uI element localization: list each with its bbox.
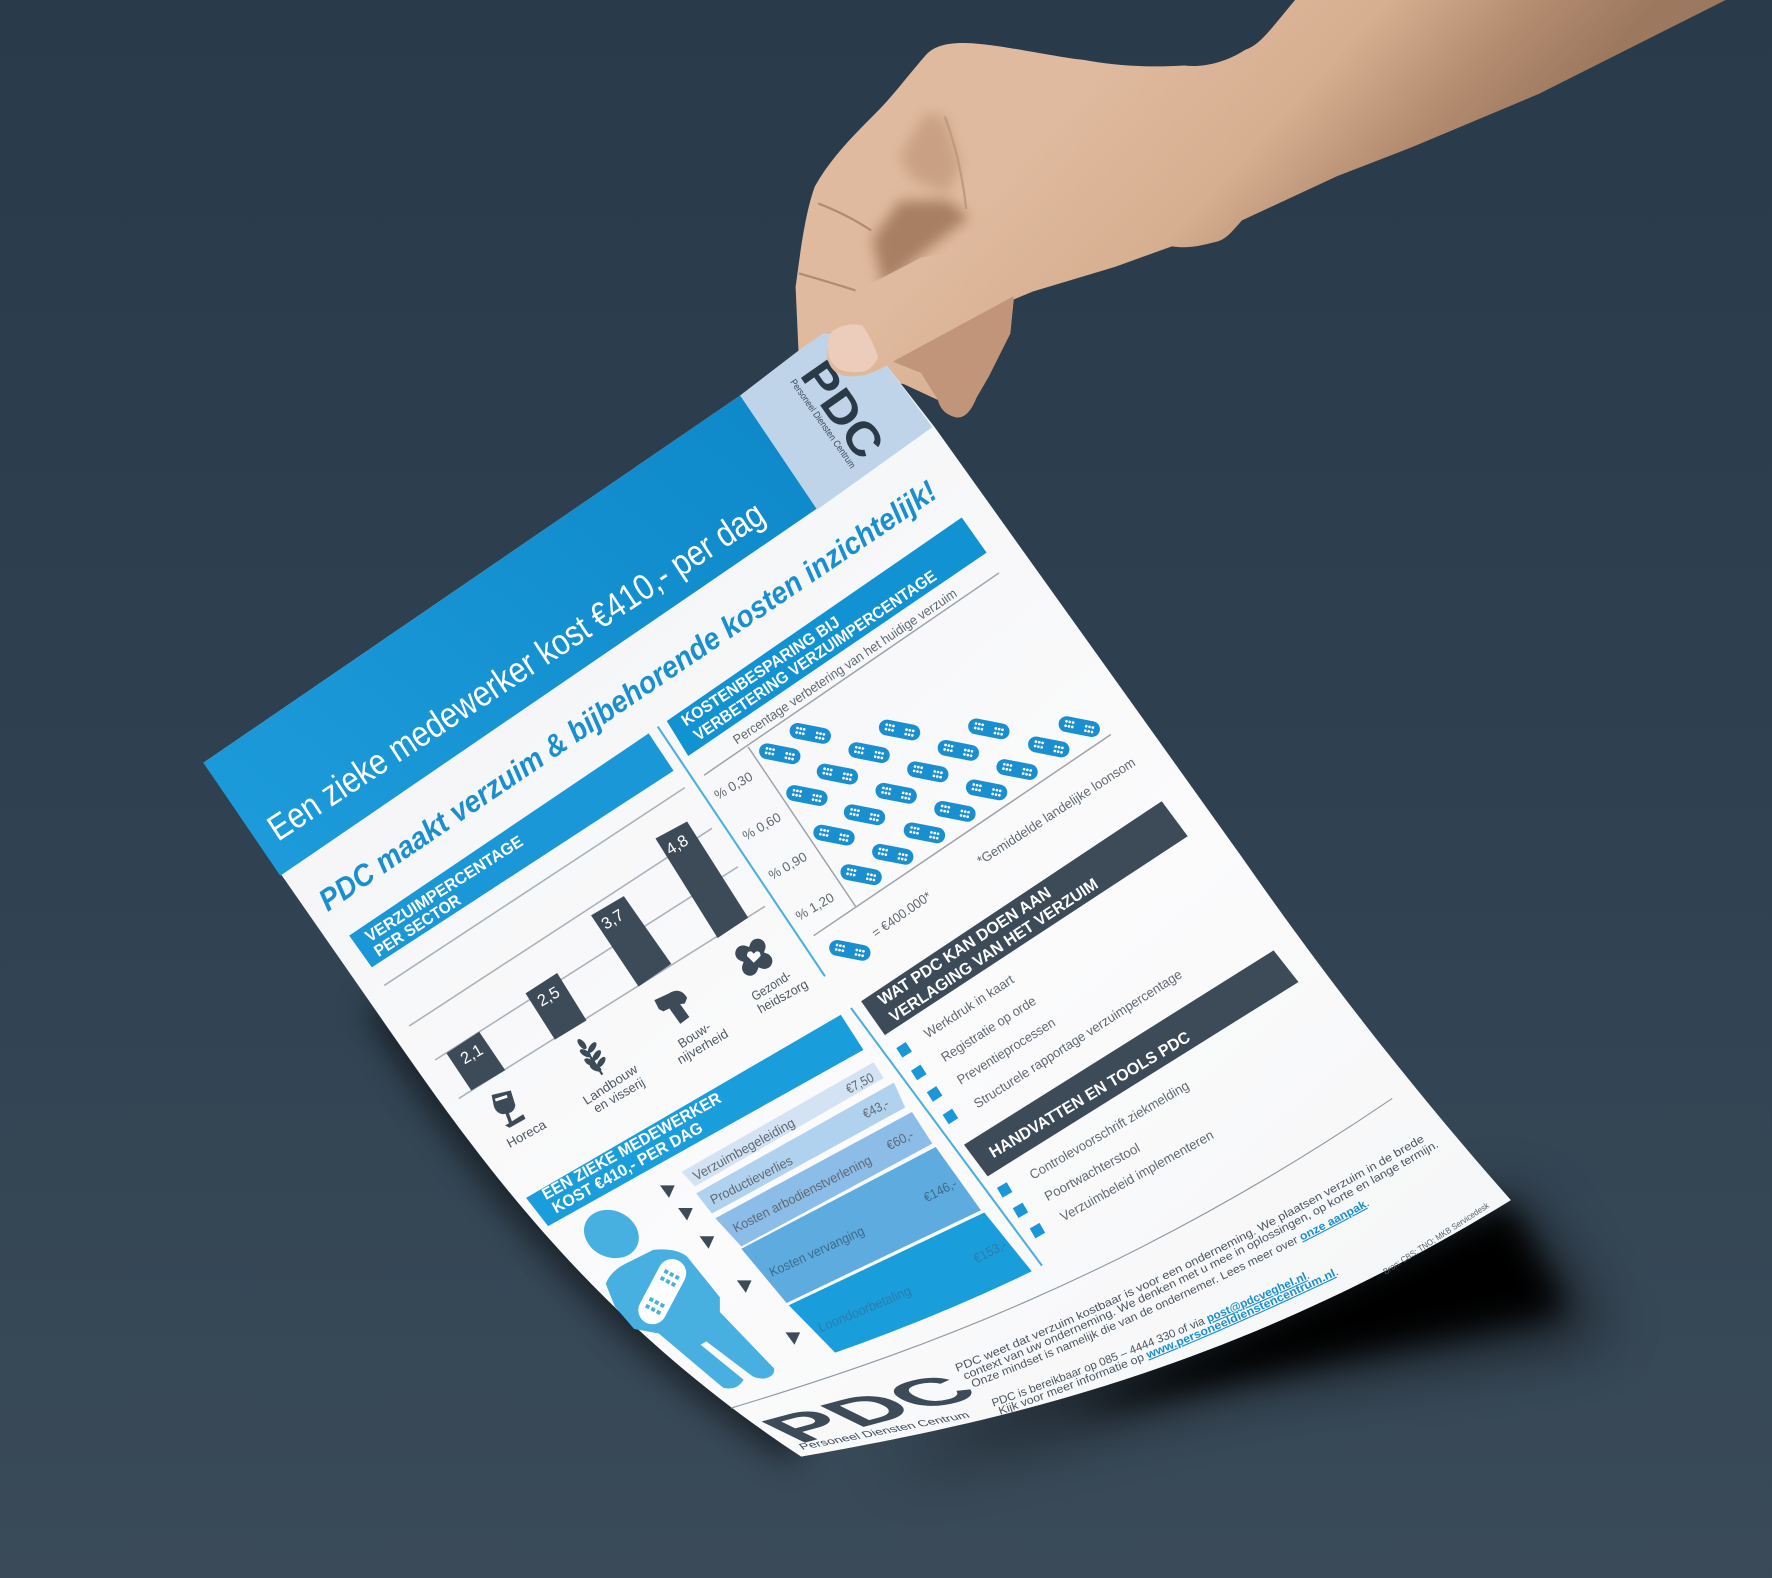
panel: handvatten en tools [964, 950, 1298, 1238]
panel: kostenbesparing [667, 518, 1138, 962]
list: Poortwachterstool [1042, 1140, 1142, 1204]
heading: verzuimpercentage [349, 733, 674, 967]
bar chart: 2,1 [457, 1041, 486, 1068]
paper sheet [203, 333, 1511, 1457]
cost stack [681, 1062, 1032, 1353]
icon: wheat [576, 1038, 607, 1075]
list: Structurele rapportage verzuimpercentage [971, 967, 1185, 1111]
list: Controlevoorschrift ziekmelding [1027, 1078, 1192, 1182]
cost stack: €153,- [971, 1237, 1009, 1266]
list [997, 1078, 1216, 1238]
axis labels [712, 769, 837, 924]
icon: health cross [729, 933, 778, 982]
panel: wat pdc kan doen [861, 801, 1188, 1124]
hand behind paper [796, 0, 1726, 417]
top logo block: PDC [791, 351, 894, 468]
heading: verzuimpercentage: VERZUIMPERCENTAGE [362, 833, 526, 946]
top logo block: Personeel Diensten Centrum [787, 377, 857, 471]
panel: verzuimpercentage per sector [349, 733, 810, 1151]
arrows [660, 1185, 800, 1345]
heading: kostenbesparing: KOSTENBESPARING BIJ [678, 613, 843, 730]
sector labels: heidszorg [755, 976, 810, 1016]
cost stack: €146,- [921, 1176, 959, 1205]
heading: handvatten en tools [964, 950, 1298, 1176]
bar chart: 4,8 [663, 832, 692, 859]
cost stack: €43,- [860, 1096, 891, 1121]
bar chart: 2,5 [534, 983, 563, 1010]
cost stack: Kosten vervanging [767, 1223, 867, 1280]
list: Preventieprocessen [954, 1015, 1058, 1087]
icon: person with plaster [576, 1201, 774, 1388]
list [896, 967, 1185, 1124]
cost stack: €60,- [884, 1127, 916, 1153]
cost stack: €7,50 [843, 1070, 876, 1097]
heading: zieke medewerker: KOST €410,- PER DAG [549, 1119, 706, 1217]
heading: zieke medewerker: EEN ZIEKE MEDEWERKER [539, 1089, 725, 1204]
icon: hammer [654, 991, 689, 1024]
heading: wat pdc kan doen: VERLAGING VAN HET VERZUIM [886, 875, 1102, 1026]
cost stack: Loondoorbetaling [816, 1283, 913, 1335]
sector labels: en visserij [591, 1074, 647, 1116]
tagline: PDC maakt verzuim & bijbehorende kosten inzichtelijk! [313, 474, 943, 918]
axis labels: % 0,90 [766, 849, 810, 883]
list: Registratie op orde [938, 993, 1039, 1065]
sector labels [504, 968, 810, 1151]
heading: wat pdc kan doen [861, 801, 1188, 1035]
chart axes [704, 573, 1111, 936]
footer logo: Personeel Diensten Centrum [796, 1410, 972, 1452]
footer text: Kijk voor meer informatie op www.personeeldienstencentrum.nl. [998, 1268, 1338, 1414]
footer logo: PDC [742, 1367, 998, 1451]
axis labels: % 1,20 [793, 890, 837, 924]
heading: kostenbesparing: VERBETERING VERZUIMPERCENTAGE [691, 567, 940, 745]
footer text: Onze mindset is namelijk die van de ondernemer. Lees meer over onze aanpak. [972, 1202, 1369, 1386]
hand: thumb over paper [827, 243, 1074, 376]
heading: zieke medewerker [526, 1015, 863, 1226]
bar chart [384, 788, 765, 1098]
legend plaster [828, 939, 872, 962]
footer text: context van uw onderneming. We denken met u mee in oplossingen, op korte en lange termijn. [964, 1144, 1438, 1379]
panel: kosten zieke medewerker [526, 1015, 1032, 1388]
sector labels: Landbouw [580, 1061, 641, 1108]
footer text: PDC is bereikbaar op 085 – 4444 330 of via post@pdcveghel.nl. [992, 1272, 1310, 1406]
sector labels: Horeca [504, 1116, 549, 1151]
sector labels: nijverheid [674, 1026, 731, 1067]
sector labels: Bouw- [675, 1019, 713, 1051]
cost stack: Productieverlies [708, 1153, 795, 1207]
footer rule [731, 1098, 1392, 1408]
heading: kostenbesparing [667, 518, 987, 756]
header band [203, 396, 817, 876]
title: Een zieke medewerker kost €410,- per dag [260, 493, 772, 849]
pictogram chart: plasters [758, 715, 1101, 886]
heading: handvatten en tools: HANDVATTEN EN TOOLS PDC [986, 1028, 1194, 1162]
axis caption: Percentage verbetering van het huidige verzuim [730, 586, 960, 747]
footer text: PDC weet dat verzuim kostbaar is voor een onderneming. We plaatsen verzuim in de brede [955, 1137, 1424, 1372]
cost stack: Verzuimbegeleiding [690, 1115, 797, 1184]
source note: Bron: CBS; TNO; MKB Servicedesk [1381, 1200, 1491, 1276]
divider lines [658, 727, 1042, 1266]
list: Werkdruk in kaart [921, 972, 1017, 1041]
icon: wine glass [492, 1090, 526, 1128]
top logo block [740, 333, 932, 510]
axis labels: % 0,60 [740, 809, 784, 843]
legend value: = €400.000* [869, 889, 934, 940]
list: Verzuimbeleid implementeren [1058, 1127, 1216, 1224]
bar chart: 3,7 [598, 906, 627, 933]
heading: verzuimpercentage: PER SECTOR [371, 891, 464, 961]
sector labels: Gezond- [749, 968, 794, 1004]
paper drop shadow [362, 994, 1605, 1469]
cost stack: Kosten arbodienstverlening [730, 1152, 874, 1236]
heading: wat pdc kan doen: WAT PDC KAN DOEN AAN [875, 884, 1054, 1009]
axis labels: % 0,30 [712, 769, 755, 803]
footnote: *Gemiddelde landelijke loonsom [974, 755, 1138, 868]
